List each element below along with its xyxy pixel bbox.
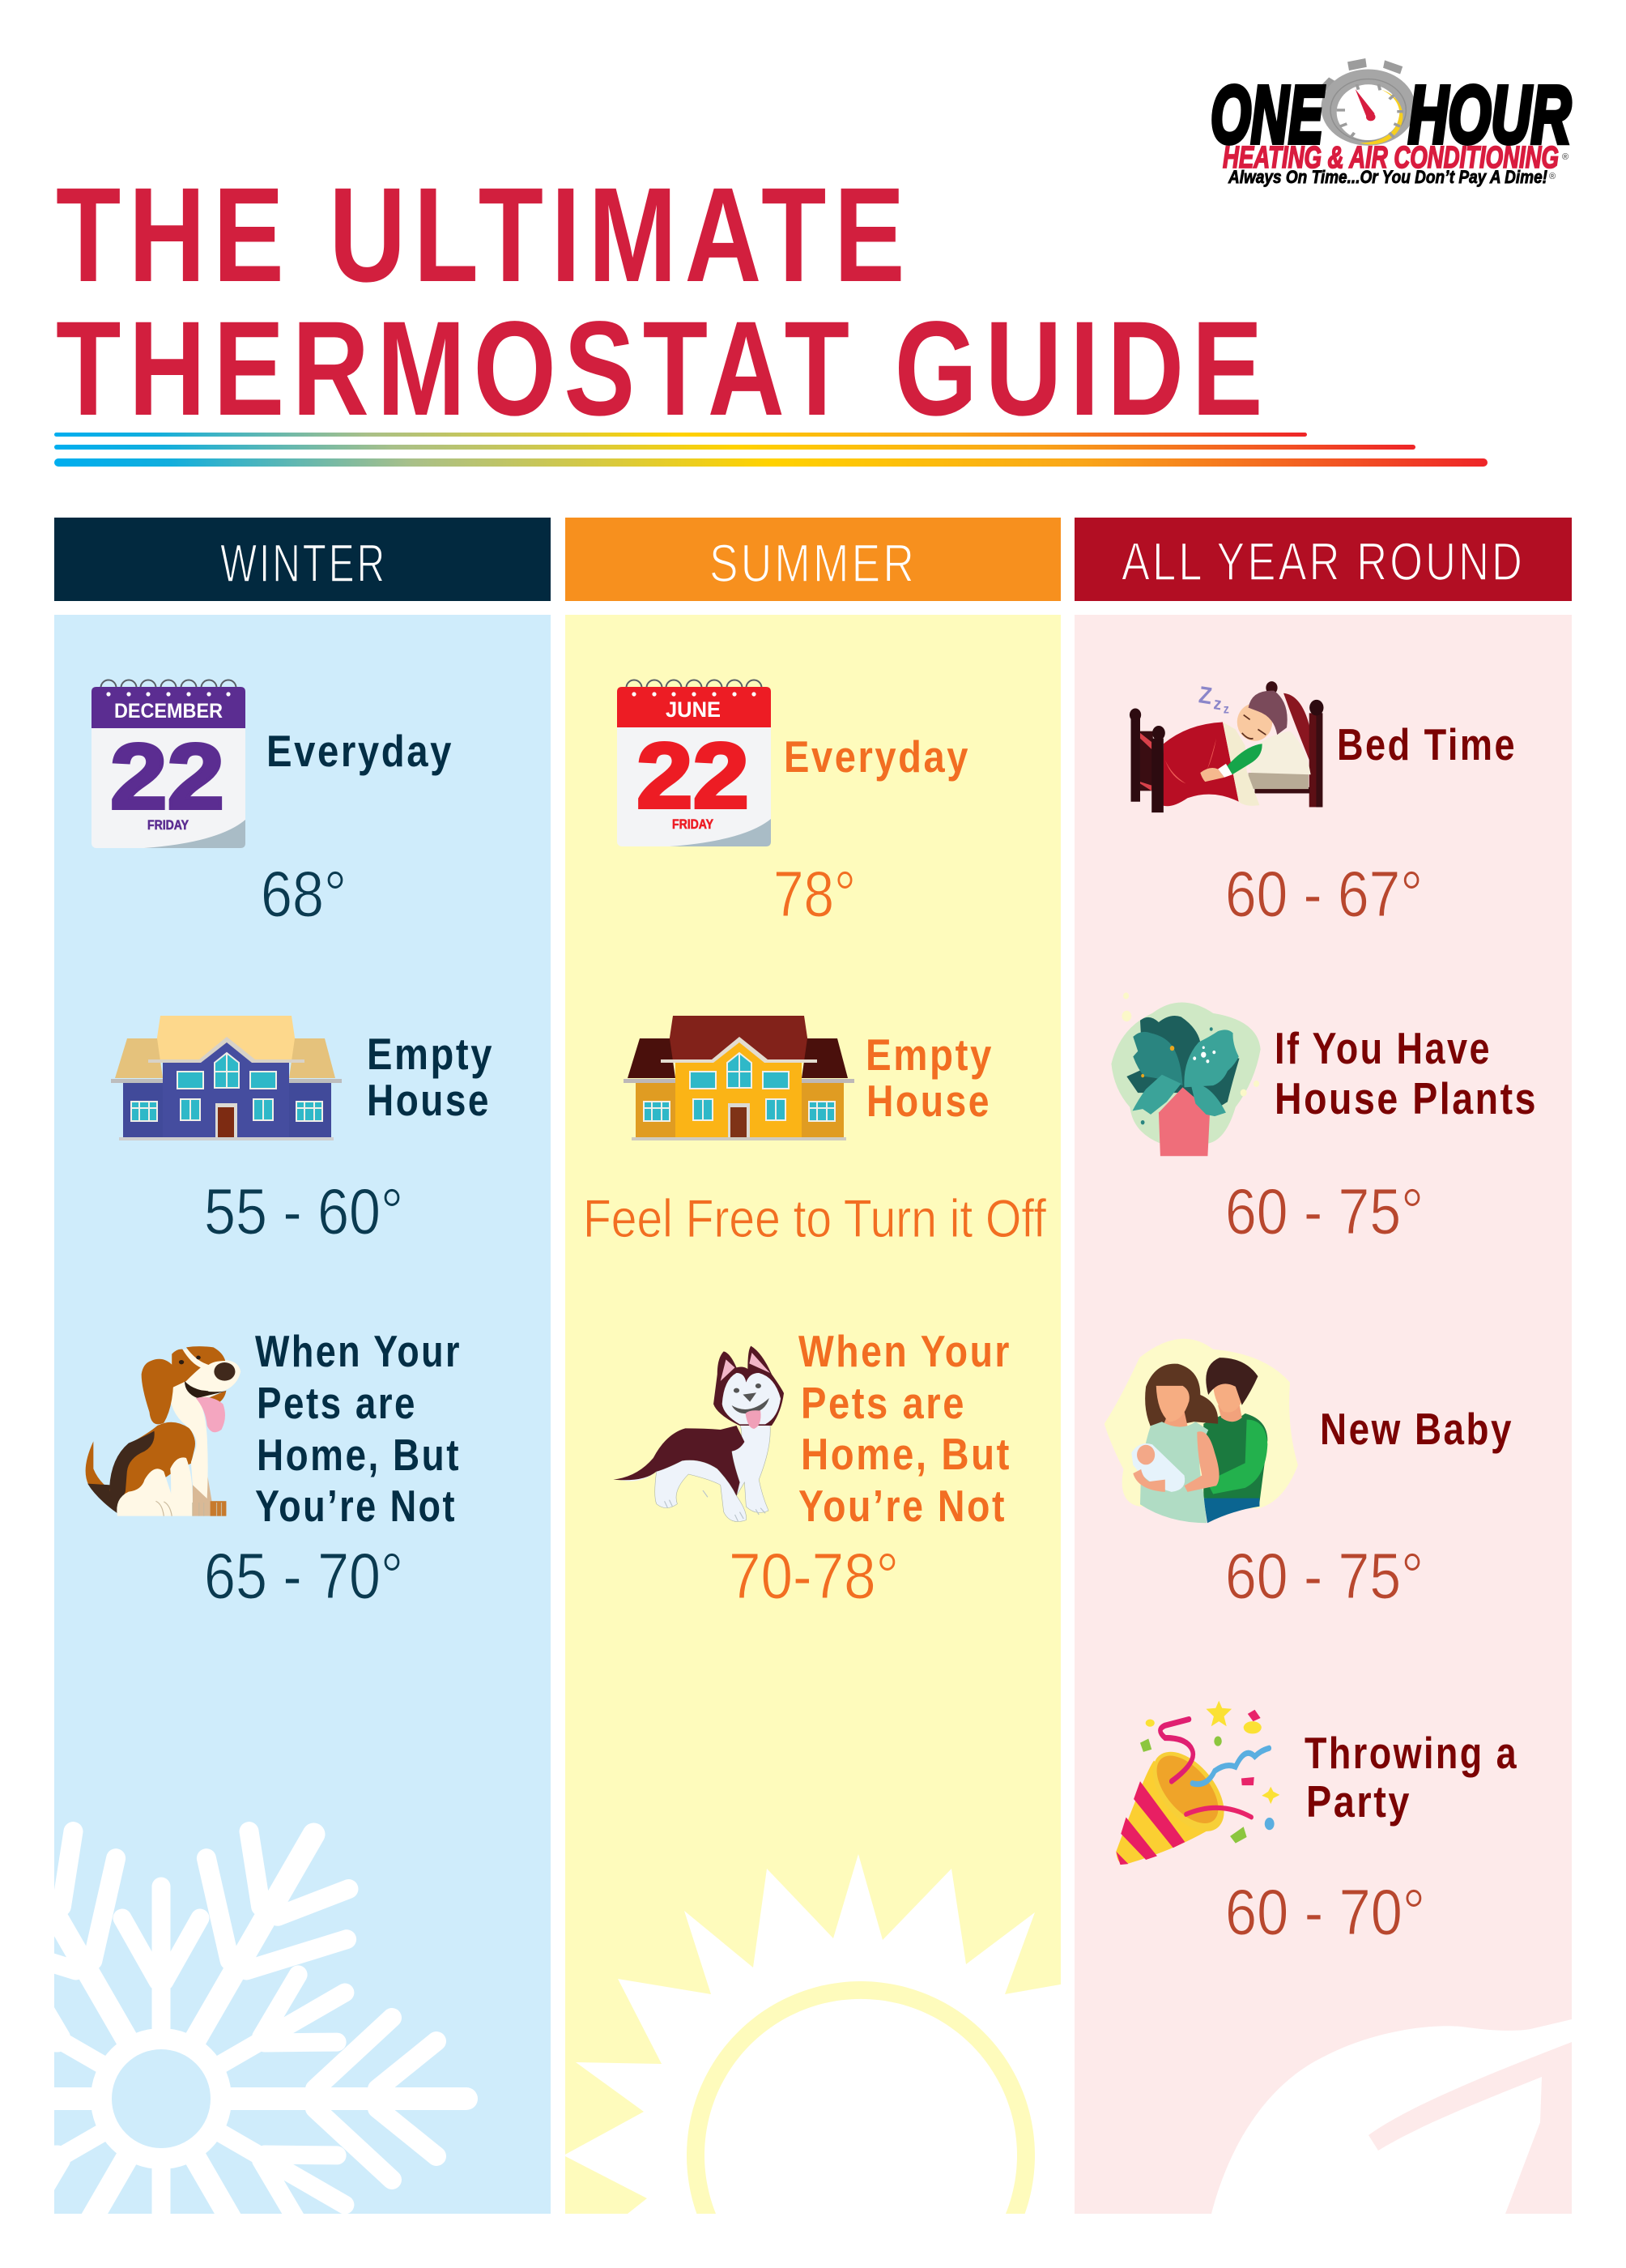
logo: ®	[1549, 172, 1556, 181]
header: summer	[565, 518, 1061, 601]
title: THERMOSTAT GUIDE	[56, 294, 1271, 444]
label: throwing a party: Throwing a	[1305, 1728, 1518, 1778]
logo: ®	[1562, 152, 1569, 162]
label: empty house: House	[367, 1075, 491, 1125]
label: everyday: Everyday	[784, 731, 970, 782]
icon: yellow house	[624, 1016, 854, 1140]
label: pets: Pets are	[257, 1378, 417, 1428]
temperature: 60-67: 60 - 67°	[1225, 858, 1423, 930]
title: THE ULTIMATE	[56, 160, 913, 310]
label: empty house: House	[866, 1076, 991, 1126]
label: pets: Home, But	[801, 1429, 1011, 1479]
label: if you have house plants	[1275, 1023, 1538, 1123]
label: pets: You’re Not	[798, 1481, 1007, 1531]
label: throwing a party: Party	[1306, 1776, 1411, 1827]
label: pets: When Your	[798, 1326, 1011, 1376]
icon: june calendar: 22	[636, 725, 749, 828]
icon: june calendar	[617, 680, 771, 846]
icon: december calendar: FRIDAY	[147, 817, 189, 833]
icon: leaf background	[1211, 2019, 1572, 2214]
logo: Always On Time...Or You Don’t Pay A Dime!	[1228, 167, 1547, 187]
icon: party popper	[1116, 1701, 1279, 1865]
panel: all year round	[1075, 615, 1572, 2214]
icon: beagle	[86, 1346, 240, 1516]
header: winter: WINTER	[220, 533, 387, 593]
logo	[1211, 58, 1571, 187]
icon: december calendar	[92, 680, 245, 848]
header: all year round	[1075, 518, 1572, 601]
title	[56, 160, 1271, 444]
icon: sleeping person in bed: Z	[1198, 681, 1214, 710]
icon: december calendar: 22	[110, 726, 224, 829]
icon: stopwatch gauge	[1320, 58, 1415, 146]
icon: sleeping person in bed: z	[1224, 702, 1229, 717]
label: if you have house plants: If You Have	[1275, 1023, 1492, 1073]
label: pets: Home, But	[257, 1430, 461, 1480]
temperature: 78: 78°	[773, 858, 856, 930]
temperature: 55-60: 55 - 60°	[204, 1175, 403, 1247]
label: throwing a party	[1305, 1728, 1518, 1827]
icon: sun background	[565, 1854, 1061, 2214]
icon: june calendar: JUNE	[666, 697, 721, 722]
label: new baby: New Baby	[1320, 1404, 1513, 1454]
icon: parents with new baby	[1105, 1339, 1298, 1523]
icon: december calendar: DECEMBER	[114, 700, 223, 723]
temperature: 70-78: 70-78°	[729, 1540, 899, 1612]
label: bed time: Bed Time	[1337, 719, 1517, 770]
icon: snowflake background	[0, 1794, 466, 2239]
temperature: 68: 68°	[261, 858, 347, 930]
header: all year round: ALL YEAR ROUND	[1122, 531, 1525, 591]
label: if you have house plants: House Plants	[1275, 1073, 1538, 1123]
icon: house plant	[1111, 992, 1261, 1156]
icon: blue house	[111, 1016, 342, 1140]
label: pets: Pets are	[801, 1378, 966, 1428]
temperature: 65-70: 65 - 70°	[204, 1540, 403, 1612]
temperature: 60-75: 60 - 75°	[1225, 1175, 1424, 1247]
icon: sleeping person in bed: z	[1212, 694, 1223, 714]
temperature: feel free to turn it off: Feel Free to Turn it Off	[583, 1188, 1047, 1248]
panel: winter	[54, 615, 551, 2214]
label: empty house	[866, 1030, 994, 1126]
label: pets: You’re Not	[255, 1481, 457, 1531]
panel: summer	[565, 615, 1061, 2214]
label: everyday: Everyday	[266, 726, 453, 776]
temperature: 60-70: 60 - 70°	[1225, 1876, 1425, 1948]
label: pets	[798, 1326, 1011, 1531]
label: pets	[255, 1326, 462, 1531]
temperature: 60-75: 60 - 75°	[1225, 1540, 1424, 1612]
icon: june calendar: FRIDAY	[672, 816, 714, 832]
logo: ONE	[1211, 70, 1325, 160]
icon: sleeping person in bed	[1130, 681, 1323, 812]
icon: husky	[613, 1346, 784, 1522]
header: winter	[54, 518, 551, 601]
label: empty house	[367, 1029, 494, 1125]
label: empty house: Empty	[367, 1029, 494, 1079]
label: empty house: Empty	[866, 1030, 994, 1080]
label: pets: When Your	[255, 1326, 462, 1376]
header: summer: SUMMER	[709, 533, 917, 593]
